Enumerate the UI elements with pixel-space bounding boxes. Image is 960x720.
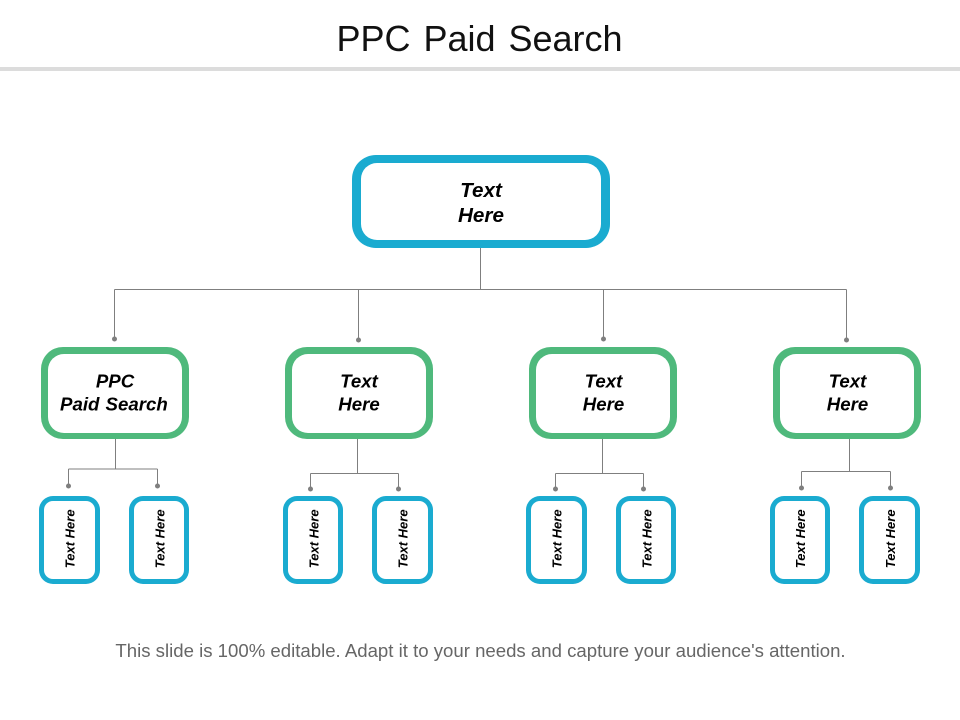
small box 5: [526, 496, 587, 584]
green box 3: [529, 347, 677, 439]
title: PPC: [336, 18, 411, 59]
small box 1: [39, 496, 100, 584]
top box: Text: [460, 179, 503, 202]
green box 1: Paid: [60, 394, 100, 414]
small box 6: Text Here: [639, 509, 654, 568]
small box 8: [859, 496, 920, 584]
small box 4: [372, 496, 433, 584]
small box 1: Text Here: [62, 509, 77, 568]
green box 4: Text: [829, 370, 867, 392]
green box 2: [285, 347, 433, 439]
green box 4: Here: [827, 394, 868, 414]
green box 4: [773, 347, 921, 439]
green box 1: Search: [106, 394, 168, 414]
green box 2: Text: [340, 370, 379, 392]
footer caption: This slide is 100% editable. Adapt it to your needs and capture your audience's attention.: [115, 640, 846, 661]
connector lines: [68, 247, 890, 489]
top box: [352, 155, 610, 248]
small box 3: [283, 496, 343, 584]
green box 1: PPC: [96, 370, 135, 392]
small box 3: Text Here: [306, 509, 321, 568]
green box 3: Here: [583, 394, 624, 414]
small box 2: [129, 496, 189, 584]
connector dots: [66, 336, 893, 492]
green box 1: [41, 347, 189, 439]
green box 3: Text: [585, 370, 623, 392]
small box 8: Text Here: [883, 509, 898, 568]
top box: Here: [458, 204, 504, 227]
small box 6: [616, 496, 676, 584]
title: Search: [508, 18, 623, 59]
small box 7: Text Here: [793, 509, 808, 568]
small box 7: [770, 496, 830, 584]
small box 4: Text Here: [395, 509, 410, 568]
small box 5: Text Here: [549, 509, 564, 568]
green box 2: Here: [338, 394, 380, 414]
small box 2: Text Here: [152, 509, 167, 568]
title: Paid: [424, 18, 496, 59]
